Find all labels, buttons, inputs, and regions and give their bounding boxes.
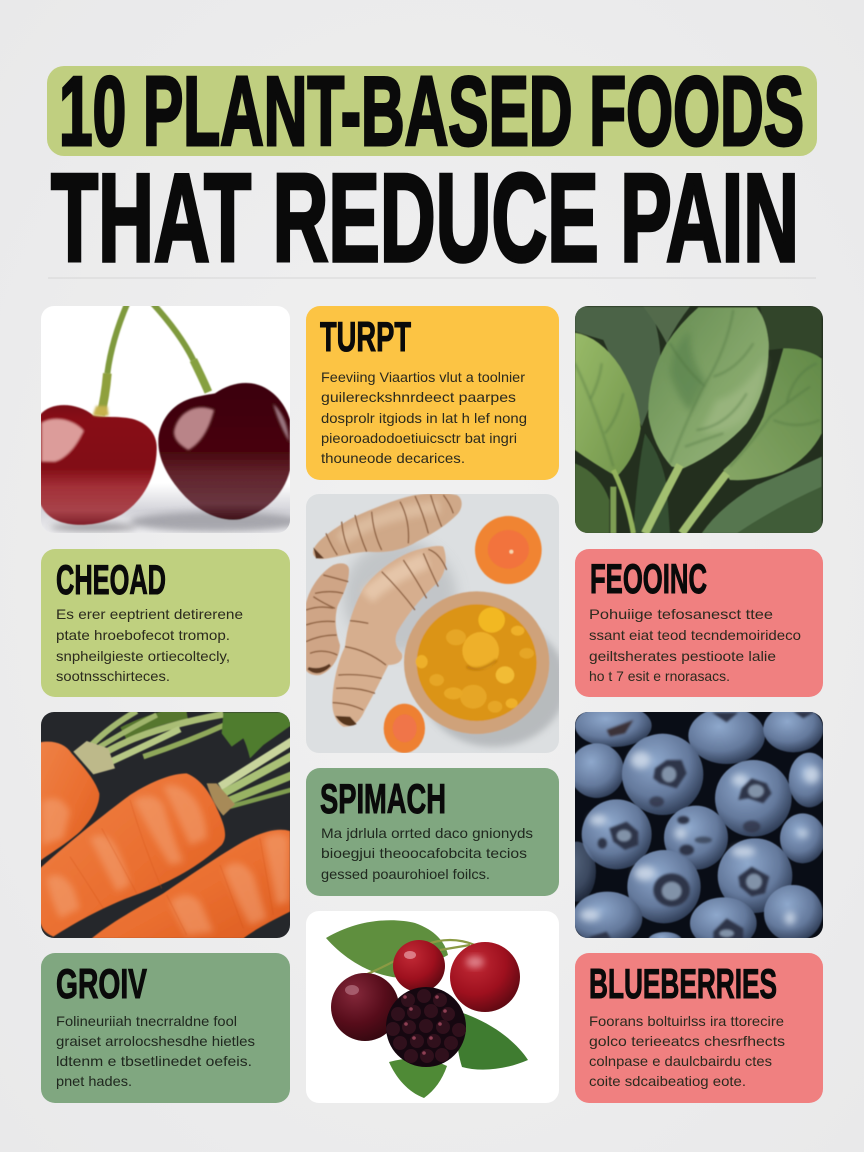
- panel: blueberries: [575, 953, 823, 1103]
- photo: blueberries: [575, 712, 823, 938]
- bottom carrot: [92, 830, 290, 938]
- panel: turpt: [306, 306, 559, 480]
- body text: colnpase e daulcbairdu ctes: [589, 1053, 772, 1069]
- body text: Ma jdrlula orrted daco gnionyds: [321, 825, 533, 841]
- leaves: [326, 920, 528, 1098]
- top root slice: [475, 516, 542, 584]
- photo: carrots: [40, 711, 297, 938]
- calyx marks: [587, 712, 815, 940]
- photo: cherries: [40, 303, 303, 533]
- body text: Pohuiige tefosanesct ttee: [589, 606, 773, 622]
- right leaf: [723, 348, 822, 480]
- body text: ho t 7 esit e rnorasacs.: [589, 668, 730, 684]
- body text: ldtenm e tbsetlinedet oefeis.: [56, 1053, 252, 1069]
- body text: [56, 1013, 255, 1089]
- body text: [56, 606, 243, 684]
- heading: TURPT: [320, 313, 411, 360]
- stems: [613, 465, 727, 533]
- turmeric bowl: [404, 591, 549, 734]
- body text: ptate hroebofecot tromop.: [56, 627, 230, 643]
- body text: sootnsschirteces.: [56, 668, 170, 684]
- berries: [575, 712, 823, 938]
- centre leaf: [648, 307, 769, 468]
- panel: cheoad: [41, 549, 290, 697]
- left carrot: [40, 742, 99, 861]
- cherries: [331, 940, 520, 1041]
- panel: spimach: [306, 768, 559, 896]
- body text: Feeviing Viaartios vlut a toolnier: [321, 369, 525, 385]
- body text: gessed poaurohioel foilcs.: [321, 866, 490, 882]
- body text: guilereckshnrdeect paarpes: [321, 389, 516, 405]
- left cherry: [40, 405, 157, 525]
- middle carrot tops: [207, 738, 297, 816]
- blackberry: [386, 987, 466, 1067]
- body text: golco terieeatcs chesrfhects: [589, 1033, 785, 1049]
- heading: GROIV: [56, 960, 147, 1007]
- title: [47, 56, 817, 288]
- panel: feooinc: [575, 549, 823, 697]
- stems: [365, 940, 475, 975]
- body text: pnet hades.: [56, 1073, 132, 1089]
- body text: geiltsherates pestioote lalie: [589, 648, 776, 664]
- heading: CHEOAD: [56, 556, 166, 603]
- body text: snpheilgieste ortiecoltecly,: [56, 648, 230, 664]
- body text: graiset arrolocshesdhe hietles: [56, 1033, 255, 1049]
- main rhizome: [332, 546, 447, 727]
- body text: bioegjui theoocafobcita tecios: [321, 845, 527, 861]
- right cherry: [158, 383, 290, 520]
- photo: spinach: [575, 306, 823, 533]
- body text: thouneode decarices.: [321, 450, 465, 466]
- heading: SPIMACH: [320, 775, 446, 822]
- top rhizome: [313, 493, 462, 559]
- body text: [321, 825, 533, 882]
- photo: berries with leaves: [306, 911, 559, 1103]
- highlights: [580, 751, 820, 925]
- heading: FEOOINC: [590, 555, 707, 602]
- left leaf: [575, 333, 641, 477]
- panel: groiv: [41, 953, 290, 1103]
- body text: Folineuriiah tnecrraldne fool: [56, 1013, 237, 1029]
- veins: [575, 310, 820, 467]
- body text: coite sdcaibeatiog eote.: [589, 1073, 746, 1089]
- middle carrot: [40, 773, 225, 937]
- body text: ssant eiat teod tecndemoirideco: [589, 627, 801, 643]
- title highlight pill: [47, 66, 817, 156]
- left rhizome: [306, 563, 349, 675]
- bottom right leaf: [702, 457, 822, 533]
- leaf: [222, 712, 292, 758]
- body text: pieoroadodoetiuicsctr bat ingri: [321, 430, 517, 446]
- left carrot tops: [73, 711, 228, 774]
- body text: [589, 1013, 785, 1089]
- small slice: [384, 704, 425, 753]
- body text: dosprolr itgiods in lat h lef nong: [321, 410, 527, 426]
- carrot highlights: [42, 785, 288, 935]
- body text: Es erer eeptrient detirerene: [56, 606, 243, 622]
- stems: [101, 303, 208, 415]
- body text: Foorans boltuirlss ira ttorecire: [589, 1013, 784, 1029]
- body text: [321, 369, 527, 466]
- photo: turmeric: [306, 493, 567, 753]
- body text: [589, 606, 801, 684]
